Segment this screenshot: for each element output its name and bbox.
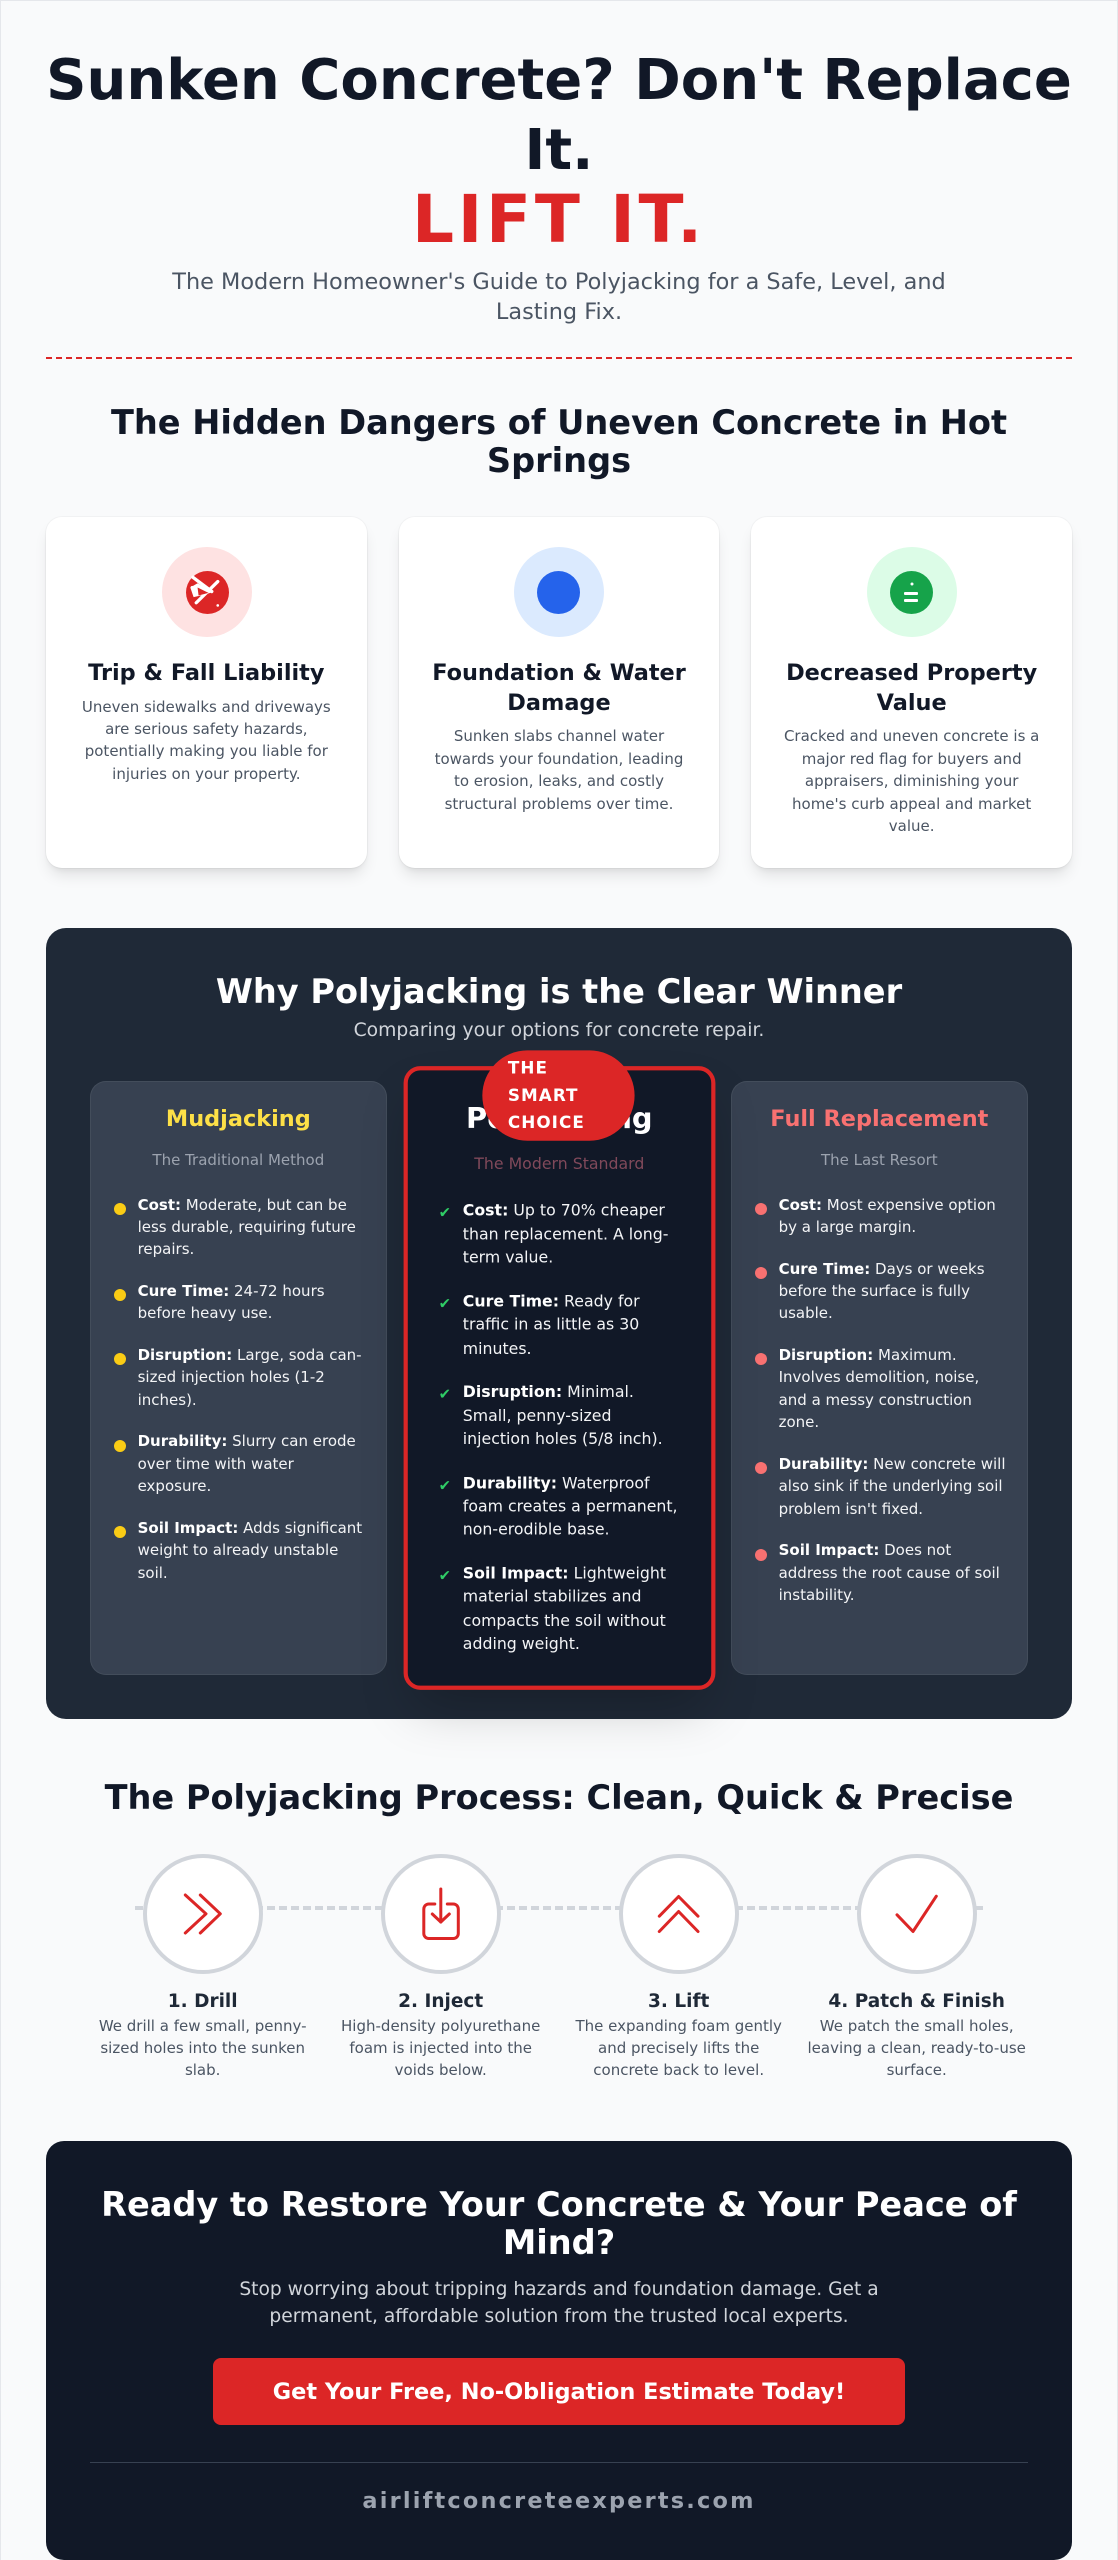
step 3 text: and precisely lifts the	[598, 2039, 759, 2057]
column heading: Full Replacement	[770, 1106, 988, 1132]
badge: the smart choice	[482, 1050, 635, 1141]
card text: major red flag for buyers and	[802, 750, 1022, 768]
card text: potentially making you liable for	[85, 742, 328, 760]
title: It.	[525, 118, 593, 183]
heading: hidden dangers: Springs	[487, 441, 631, 480]
list: full replacement: Involves demolition, noise,	[779, 1368, 979, 1386]
list: polyjacking: non-erodible base.	[462, 1520, 609, 1539]
list: polyjacking: minutes.	[462, 1339, 531, 1358]
badge: the smart choice: THE	[508, 1058, 548, 1078]
list: full replacement: before the surface is fully	[779, 1282, 970, 1300]
panel: property value card	[751, 517, 1072, 868]
list: polyjacking: Small, penny-sized	[462, 1406, 611, 1425]
list: polyjacking	[438, 1201, 677, 1653]
card heading: Foundation & Water	[432, 660, 686, 686]
card text: value.	[889, 817, 935, 835]
step 4 title: 4. Patch & Finish	[828, 1990, 1005, 2012]
card heading	[786, 660, 1037, 716]
card text: Cracked and uneven concrete is a	[784, 727, 1039, 745]
column: polyjacking highlighted: ✔	[438, 1205, 451, 1222]
list: polyjacking: Cure Time: Ready for	[462, 1292, 639, 1310]
card text: towards your foundation, leading	[435, 750, 683, 768]
step icon 2: inject	[381, 1854, 501, 1974]
list: full replacement: Cure Time: Days or weeks	[779, 1260, 985, 1278]
list: mudjacking: weight to already unstable	[138, 1541, 338, 1559]
column heading: Polyjacking	[466, 1102, 652, 1135]
step 1 text: We drill a few small, penny-	[99, 2016, 307, 2034]
step icon 3: lift	[619, 1854, 739, 1974]
list: full replacement: address the root cause of soil	[779, 1564, 1000, 1582]
website address: airliftconcreteexperts.com	[362, 2488, 756, 2514]
card text: injuries on your property.	[112, 765, 300, 783]
card text: are serious safety hazards,	[105, 720, 308, 738]
list: mudjacking: Disruption: Large, soda can-	[138, 1346, 362, 1364]
step 2 text	[341, 2016, 540, 2079]
list: full replacement: Soil Impact: Does not	[779, 1541, 951, 1559]
step 3 text: The expanding foam gently	[575, 2016, 782, 2034]
heading: hidden dangers: The Hidden Dangers of Uneven Concrete in Hot	[111, 403, 1007, 442]
list: mudjacking: exposure.	[138, 1477, 211, 1495]
list: polyjacking: than replacement. A long-	[462, 1224, 668, 1243]
comparison heading: Why Polyjacking is the Clear Winner	[216, 972, 902, 1011]
card text	[784, 727, 1039, 835]
panel: foundation card	[399, 517, 719, 868]
icon: trip hazard	[162, 547, 252, 637]
list: polyjacking: traffic in as little as 30	[462, 1315, 639, 1334]
panel: comparison	[46, 928, 1072, 1719]
step 3 title: 3. Lift	[648, 1990, 709, 2012]
step 4 text	[808, 2016, 1026, 2079]
step 1 text: sized holes into the sunken	[100, 2039, 305, 2057]
list: mudjacking: sized injection holes (1-2	[138, 1368, 325, 1386]
column: polyjacking highlighted: ✔	[438, 1296, 451, 1313]
column subtitle: The Modern Standard	[474, 1154, 644, 1173]
step 1 text	[99, 2016, 307, 2079]
step 1 text: slab.	[185, 2061, 220, 2079]
card text: home's curb appeal and market	[792, 795, 1031, 813]
list: polyjacking: Soil Impact: Lightweight	[462, 1564, 666, 1583]
list: polyjacking: adding weight.	[462, 1634, 580, 1653]
list: mudjacking: soil.	[138, 1564, 168, 1582]
CTA heading	[101, 2185, 1018, 2262]
list: polyjacking: material stabilizes and	[462, 1587, 641, 1606]
subtitle: Lasting Fix.	[496, 299, 622, 325]
step icon 1: drill	[143, 1854, 263, 1974]
list: mudjacking	[114, 1196, 362, 1582]
card text	[82, 698, 331, 783]
icon: water	[514, 547, 604, 637]
comparison subheading: Comparing your options for concrete repair.	[354, 1020, 764, 1041]
list: full replacement: usable.	[779, 1304, 833, 1322]
CTA text: Stop worrying about tripping hazards and foundation damage. Get a	[239, 2279, 879, 2300]
step 3 text: concrete back to level.	[593, 2061, 764, 2079]
list: polyjacking: compacts the soil without	[462, 1611, 665, 1630]
list: polyjacking: injection holes (5/8 inch).	[462, 1429, 662, 1448]
CTA heading: Ready to Restore Your Concrete & Your Peace of	[101, 2185, 1017, 2224]
list: full replacement: Disruption: Maximum.	[779, 1346, 957, 1364]
list: mudjacking: Durability: Slurry can erode	[138, 1432, 356, 1450]
heading: hidden dangers	[111, 403, 1007, 480]
badge: the smart choice: SMART	[508, 1085, 578, 1105]
card text: structural problems over time.	[445, 795, 673, 813]
list: full replacement: Durability: New concrete will	[779, 1455, 1006, 1473]
CTA button	[213, 2358, 905, 2425]
list: mudjacking: Cure Time: 24-72 hours	[138, 1282, 325, 1300]
list: mudjacking: Soil Impact: Adds significant	[138, 1519, 362, 1537]
list: full replacement: Cost: Most expensive option	[779, 1196, 996, 1214]
card heading: Value	[877, 690, 947, 716]
column subtitle: The Traditional Method	[152, 1151, 324, 1169]
card text	[435, 727, 683, 813]
list: mudjacking: repairs.	[138, 1240, 194, 1258]
step 2 text: foam is injected into the	[349, 2039, 532, 2057]
list: mudjacking: over time with water	[138, 1455, 294, 1473]
column: polyjacking highlighted	[403, 1066, 715, 1690]
panel: call to action	[46, 2141, 1072, 2560]
list: polyjacking: foam creates a permanent,	[462, 1497, 677, 1515]
step 3 text	[575, 2016, 782, 2079]
badge: the smart choice: CHOICE	[508, 1112, 585, 1132]
subtitle: The Modern Homeowner's Guide to Polyjacking for a Safe, Level, and	[172, 269, 946, 295]
column heading: Mudjacking	[166, 1106, 311, 1132]
list: full replacement: and a messy construction	[779, 1391, 972, 1409]
card text: Uneven sidewalks and driveways	[82, 698, 331, 716]
list: full replacement: by a large margin.	[779, 1218, 916, 1236]
title	[46, 48, 1072, 183]
CTA text: permanent, affordable solution from the trusted local experts.	[269, 2306, 849, 2327]
icon: value	[867, 547, 957, 637]
step icon 4: patch and finish	[857, 1854, 977, 1974]
card heading	[432, 660, 686, 716]
title highlight: LIFT IT: LIFT IT.	[412, 181, 706, 258]
step 4 text: surface.	[887, 2061, 947, 2079]
CTA text	[239, 2279, 879, 2327]
list: mudjacking: inches).	[138, 1391, 197, 1409]
list: polyjacking: Durability: Waterproof	[462, 1473, 649, 1492]
column subtitle: The Last Resort	[821, 1151, 938, 1169]
list: full replacement: zone.	[779, 1413, 819, 1431]
list: full replacement	[755, 1196, 1006, 1604]
step 2 text: High-density polyurethane	[341, 2016, 540, 2034]
list: full replacement: problem isn't fixed.	[779, 1500, 923, 1518]
list: polyjacking: Disruption: Minimal.	[462, 1382, 634, 1401]
title: Sunken Concrete? Don't Replace	[46, 48, 1072, 113]
CTA heading: Mind?	[503, 2223, 615, 2262]
card text: appraisers, diminishing your	[805, 772, 1018, 790]
heading: process: The Polyjacking Process: Clean, Quick & Precise	[105, 1778, 1013, 1816]
step 4 text: leaving a clean, ready-to-use	[808, 2039, 1026, 2057]
card heading: Trip & Fall Liability	[88, 660, 324, 686]
step 1 title: 1. Drill	[168, 1990, 238, 2012]
column: mudjacking	[90, 1081, 387, 1675]
list: full replacement: also sink if the underlying soil	[779, 1477, 1003, 1495]
list: polyjacking: Cost: Up to 70% cheaper	[462, 1201, 665, 1220]
list: full replacement: instability.	[779, 1586, 855, 1604]
list: mudjacking: less durable, requiring future	[138, 1218, 356, 1236]
subtitle	[172, 269, 946, 325]
column: full replacement	[731, 1081, 1028, 1675]
list: polyjacking: term value.	[462, 1248, 553, 1267]
CTA button: Get Your Free, No-Obligation Estimate Today!	[273, 2379, 845, 2405]
column: polyjacking highlighted: ✔	[438, 1387, 451, 1403]
step 2 text: voids below.	[395, 2061, 487, 2079]
card text: Sunken slabs channel water	[454, 727, 664, 745]
step 2 title: 2. Inject	[398, 1990, 483, 2012]
list: mudjacking: before heavy use.	[138, 1304, 272, 1322]
list: mudjacking: Cost: Moderate, but can be	[138, 1196, 347, 1214]
step 4 text: We patch the small holes,	[820, 2016, 1014, 2034]
column: polyjacking highlighted: ✔	[438, 1568, 451, 1585]
column: polyjacking highlighted: ✔	[438, 1477, 451, 1494]
card text: to erosion, leaks, and costly	[454, 772, 664, 790]
panel: trip and fall card	[46, 517, 367, 868]
card heading: Damage	[507, 690, 611, 716]
card heading: Decreased Property	[786, 660, 1037, 686]
